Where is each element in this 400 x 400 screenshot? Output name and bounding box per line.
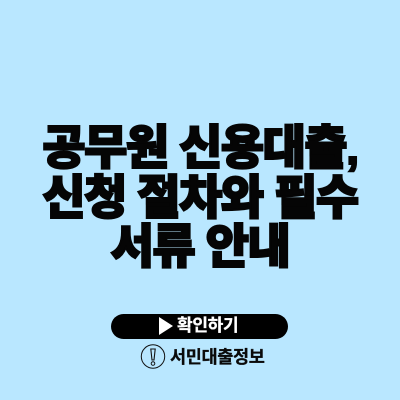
title: 서류 안내: [111, 220, 289, 273]
title: 신청 절차와 필수: [42, 171, 358, 224]
button label: 확인하기: [177, 316, 238, 335]
brand logo: [140, 344, 264, 369]
brand name: 서민대출정보: [170, 347, 264, 367]
icon: exclamation circle: [140, 344, 166, 369]
title: 공무원 신용대출,: [42, 121, 358, 174]
icon: play triangle: [159, 317, 173, 335]
button: confirm: [111, 314, 288, 339]
title: [42, 121, 358, 273]
